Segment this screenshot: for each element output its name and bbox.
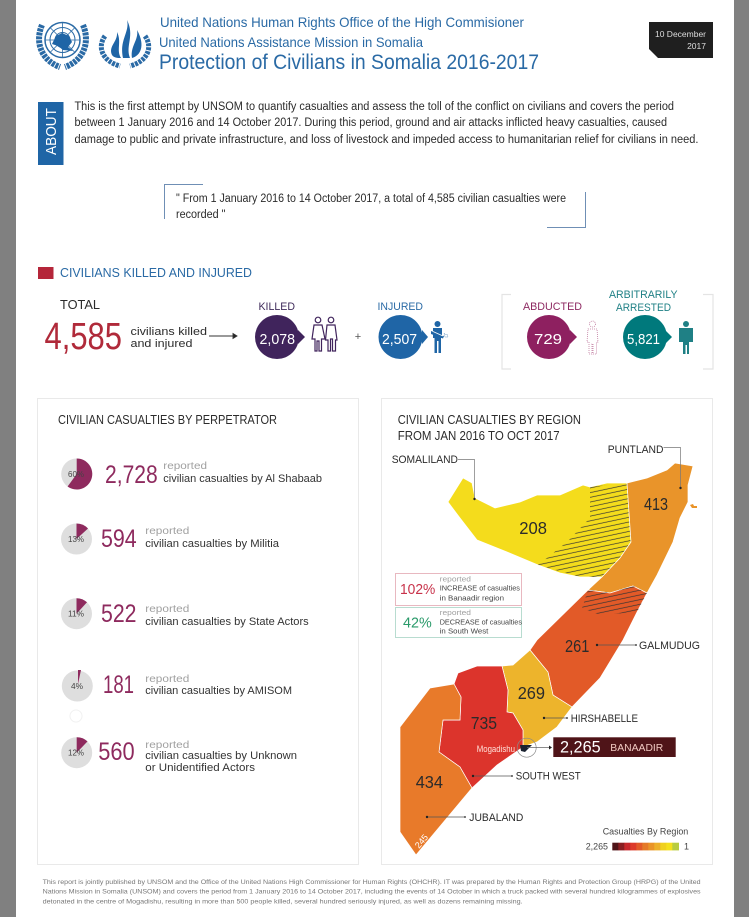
- header titles: Protection of Civilians in Somalia 2016-2017: [159, 51, 539, 74]
- map of Somalia regions: [400, 463, 697, 855]
- header titles: United Nations Human Rights Office of the High Commisioner: [160, 14, 524, 30]
- about text: between 1 January 2016 and 14 October 2017. During this period, ground and air attacks inflicted heavy casualties, caused: [74, 117, 667, 129]
- callout: decrease in South West: [396, 608, 522, 638]
- region: Hirshabelle: [502, 650, 572, 747]
- row: Unknown or Unidentified Actors: or Unidentified Actors: [145, 762, 256, 774]
- footer note: detonated in the centre of Mogadishu, resulting in more than 500 people killed, several hundred seriously injured, as well as dozens remaining missing.: [43, 898, 523, 905]
- callout: Banaadir: 2,265: [560, 738, 601, 757]
- legend: casualties by region: 2,265: [586, 842, 608, 852]
- row: Al Shabaab: 2,728: [105, 461, 158, 489]
- row: State Actors: civilian casualties by State Actors: [145, 616, 309, 628]
- row: Militia: [61, 523, 280, 554]
- icon: UN emblem: [39, 22, 86, 67]
- label: Hirshabelle: [543, 713, 638, 725]
- map values: 735: [471, 713, 497, 733]
- icon: arrested person: [679, 321, 693, 354]
- callout: decrease in South West: reported: [440, 608, 471, 617]
- row: Al Shabaab: reported: [163, 460, 207, 472]
- row: Al Shabaab: 60%: [68, 470, 84, 479]
- header titles: [159, 14, 539, 74]
- panel heading: [398, 413, 581, 443]
- row: AMISOM: [62, 670, 292, 702]
- total casualties: TOTAL: [60, 297, 100, 312]
- about text: This is the first attempt by UNSOM to quantify casualties and assess the toll of the conflict on civilians and covers the period: [74, 101, 674, 113]
- row: Militia: 13%: [68, 535, 84, 544]
- map values: 208: [519, 518, 547, 538]
- callout: increase in Banaadir: 102%: [400, 582, 435, 598]
- legend: casualties by region: 1: [684, 842, 689, 852]
- about text: [74, 101, 698, 146]
- callout: increase in Banaadir: reported: [440, 575, 471, 584]
- empty circle marker: [70, 710, 82, 722]
- stat: arbitrarily arrested: ARBITRARILY: [609, 289, 678, 301]
- row: Militia: reported: [145, 525, 189, 537]
- row: Unknown or Unidentified Actors: [61, 737, 297, 774]
- region: Galmudug: [530, 586, 647, 707]
- label: Puntland: PUNTLAND: [608, 444, 664, 456]
- row: State Actors: [61, 598, 309, 629]
- row: Unknown or Unidentified Actors: 560: [98, 738, 135, 766]
- callout: Banaadir: [553, 737, 676, 757]
- row: Unknown or Unidentified Actors: civilian casualties by Unknown: [145, 750, 297, 762]
- region: Galmudug disputed hatch: [582, 586, 647, 615]
- header titles: United Nations Assistance Mission in Somalia: [159, 34, 423, 50]
- panel: casualties by perpetrator: [38, 398, 358, 864]
- panel heading: FROM JAN 2016 TO OCT 2017: [398, 429, 560, 443]
- callout: increase in Banaadir: [396, 574, 522, 606]
- row: State Actors: 522: [101, 600, 136, 628]
- bracket around abducted and arrested: [502, 294, 713, 369]
- map values: 413: [644, 494, 668, 514]
- row: State Actors: 11%: [68, 610, 84, 619]
- label: Galmudug: GALMUDUG: [639, 640, 700, 652]
- about tab: [38, 102, 64, 165]
- stat: injured: INJURED: [378, 301, 423, 313]
- quote callout: " From 1 January 2016 to 14 October 2017, a total of 4,585 civilian casualties were: [176, 193, 566, 205]
- total casualties: [44, 297, 207, 358]
- label: South West: [472, 770, 581, 782]
- row: State Actors: reported: [145, 603, 189, 615]
- region: Jubaland: [400, 684, 472, 855]
- Mogadishu marker: Mogadishu: [477, 744, 515, 755]
- row: Unknown or Unidentified Actors: 12%: [68, 749, 84, 758]
- label: Somaliland: [392, 454, 476, 500]
- date badge: [649, 22, 713, 58]
- callout: decrease in South West: 42%: [403, 616, 432, 632]
- panel: casualties by region: [382, 398, 712, 864]
- region: Somaliland: [448, 478, 631, 577]
- row: Al Shabaab: civilian casualties by Al Shabaab: [163, 473, 322, 485]
- row: Militia: civilian casualties by Militia: [145, 538, 280, 550]
- row: Unknown or Unidentified Actors: reported: [145, 739, 189, 751]
- quote callout: [164, 184, 586, 228]
- row: AMISOM: 181: [103, 671, 134, 699]
- row: Militia: 594: [101, 525, 137, 553]
- stat: injured: 2,507: [382, 331, 417, 348]
- arrow: total to killed: [209, 334, 237, 338]
- about tab: ABOUT: [43, 108, 60, 155]
- legend: casualties by region: Casualties By Region: [603, 827, 688, 837]
- Mogadishu marker: [477, 738, 552, 757]
- callout: decrease in South West: in South West: [440, 627, 489, 636]
- icon: OHCHR flame emblem: [101, 20, 149, 66]
- row: AMISOM: civilian casualties by AMISOM: [145, 685, 292, 697]
- map values: 245: [413, 832, 430, 850]
- stat: abducted: 729: [534, 331, 562, 348]
- map values: 434: [416, 772, 443, 792]
- label: Galmudug: [596, 640, 700, 652]
- icon: injured civilian: [431, 321, 448, 353]
- section heading: civilians killed and injured: CIVILIANS KILLED AND INJURED: [60, 265, 252, 280]
- stat: arbitrarily arrested: [609, 289, 678, 359]
- legend: casualties by region: [586, 827, 689, 852]
- region: Puntland: [588, 463, 693, 593]
- callout: increase in Banaadir: INCREASE of casualties: [440, 584, 520, 592]
- callout: Banaadir: BANAADIR: [610, 742, 664, 754]
- label: Puntland: [608, 444, 682, 489]
- footer note: This report is jointly published by UNSOM and the Office of the United Nations High Commissioner for Human Rights (OHCHR). IT was prepared by the Human Rights and Protection Group (HRPG) of the United: [43, 879, 701, 886]
- label: Somaliland: SOMALILAND: [392, 454, 458, 466]
- callout: increase in Banaadir: in Banaadir region: [440, 594, 504, 602]
- islet: [690, 504, 697, 508]
- map values: [413, 494, 668, 850]
- stat: injured: [378, 301, 428, 359]
- map values: 261: [565, 636, 589, 656]
- region: Somaliland disputed hatch: [538, 483, 631, 577]
- stat: killed: 2,078: [260, 331, 295, 348]
- panel heading: CIVILIAN CASUALTIES BY PERPETRATOR: [58, 413, 277, 427]
- panel heading: CIVILIAN CASUALTIES BY REGION: [398, 413, 581, 427]
- plus sign: +: [355, 331, 361, 343]
- callout: decrease in South West: DECREASE of casualties: [440, 617, 522, 626]
- total casualties: and injured: [130, 338, 192, 350]
- date badge: 10 December: [655, 29, 706, 39]
- stat: arbitrarily arrested: ARRESTED: [616, 302, 671, 314]
- footer note: Nations Mission in Somalia (UNSOM) and covers the period from 1 January 2016 to 14 October 2017, including the events of 14 October in which a truck packed with several hundred kilogrammes of explosives: [43, 888, 701, 896]
- icon: two civilians killed: [312, 317, 337, 351]
- label: Jubaland: [426, 812, 523, 824]
- row: AMISOM: 4%: [71, 682, 83, 691]
- icon: abducted dotted person: [587, 321, 598, 354]
- date badge: 2017: [687, 41, 706, 51]
- region: South West: [439, 666, 523, 788]
- stat: killed: KILLED: [258, 301, 295, 313]
- stat: killed: [255, 301, 305, 359]
- footer note: [43, 879, 701, 905]
- stat: abducted: [523, 301, 582, 359]
- label: Jubaland: JUBALAND: [469, 812, 523, 824]
- total casualties: 4,585: [44, 316, 122, 358]
- row: Al Shabaab: [61, 458, 322, 490]
- map values: 269: [518, 683, 545, 703]
- quote callout: recorded ": [176, 209, 226, 221]
- row: AMISOM: reported: [145, 673, 189, 685]
- label: South West: SOUTH WEST: [516, 770, 581, 782]
- stat: arbitrarily arrested: 5,821: [627, 331, 660, 348]
- stat: abducted: ABDUCTED: [523, 301, 582, 313]
- label: Hirshabelle: HIRSHABELLE: [571, 713, 638, 725]
- about text: damage to public and private infrastructure, and loss of livestock and impeded access to humanitarian relief for civilians in need.: [74, 134, 698, 146]
- total casualties: civilians killed: [130, 326, 207, 338]
